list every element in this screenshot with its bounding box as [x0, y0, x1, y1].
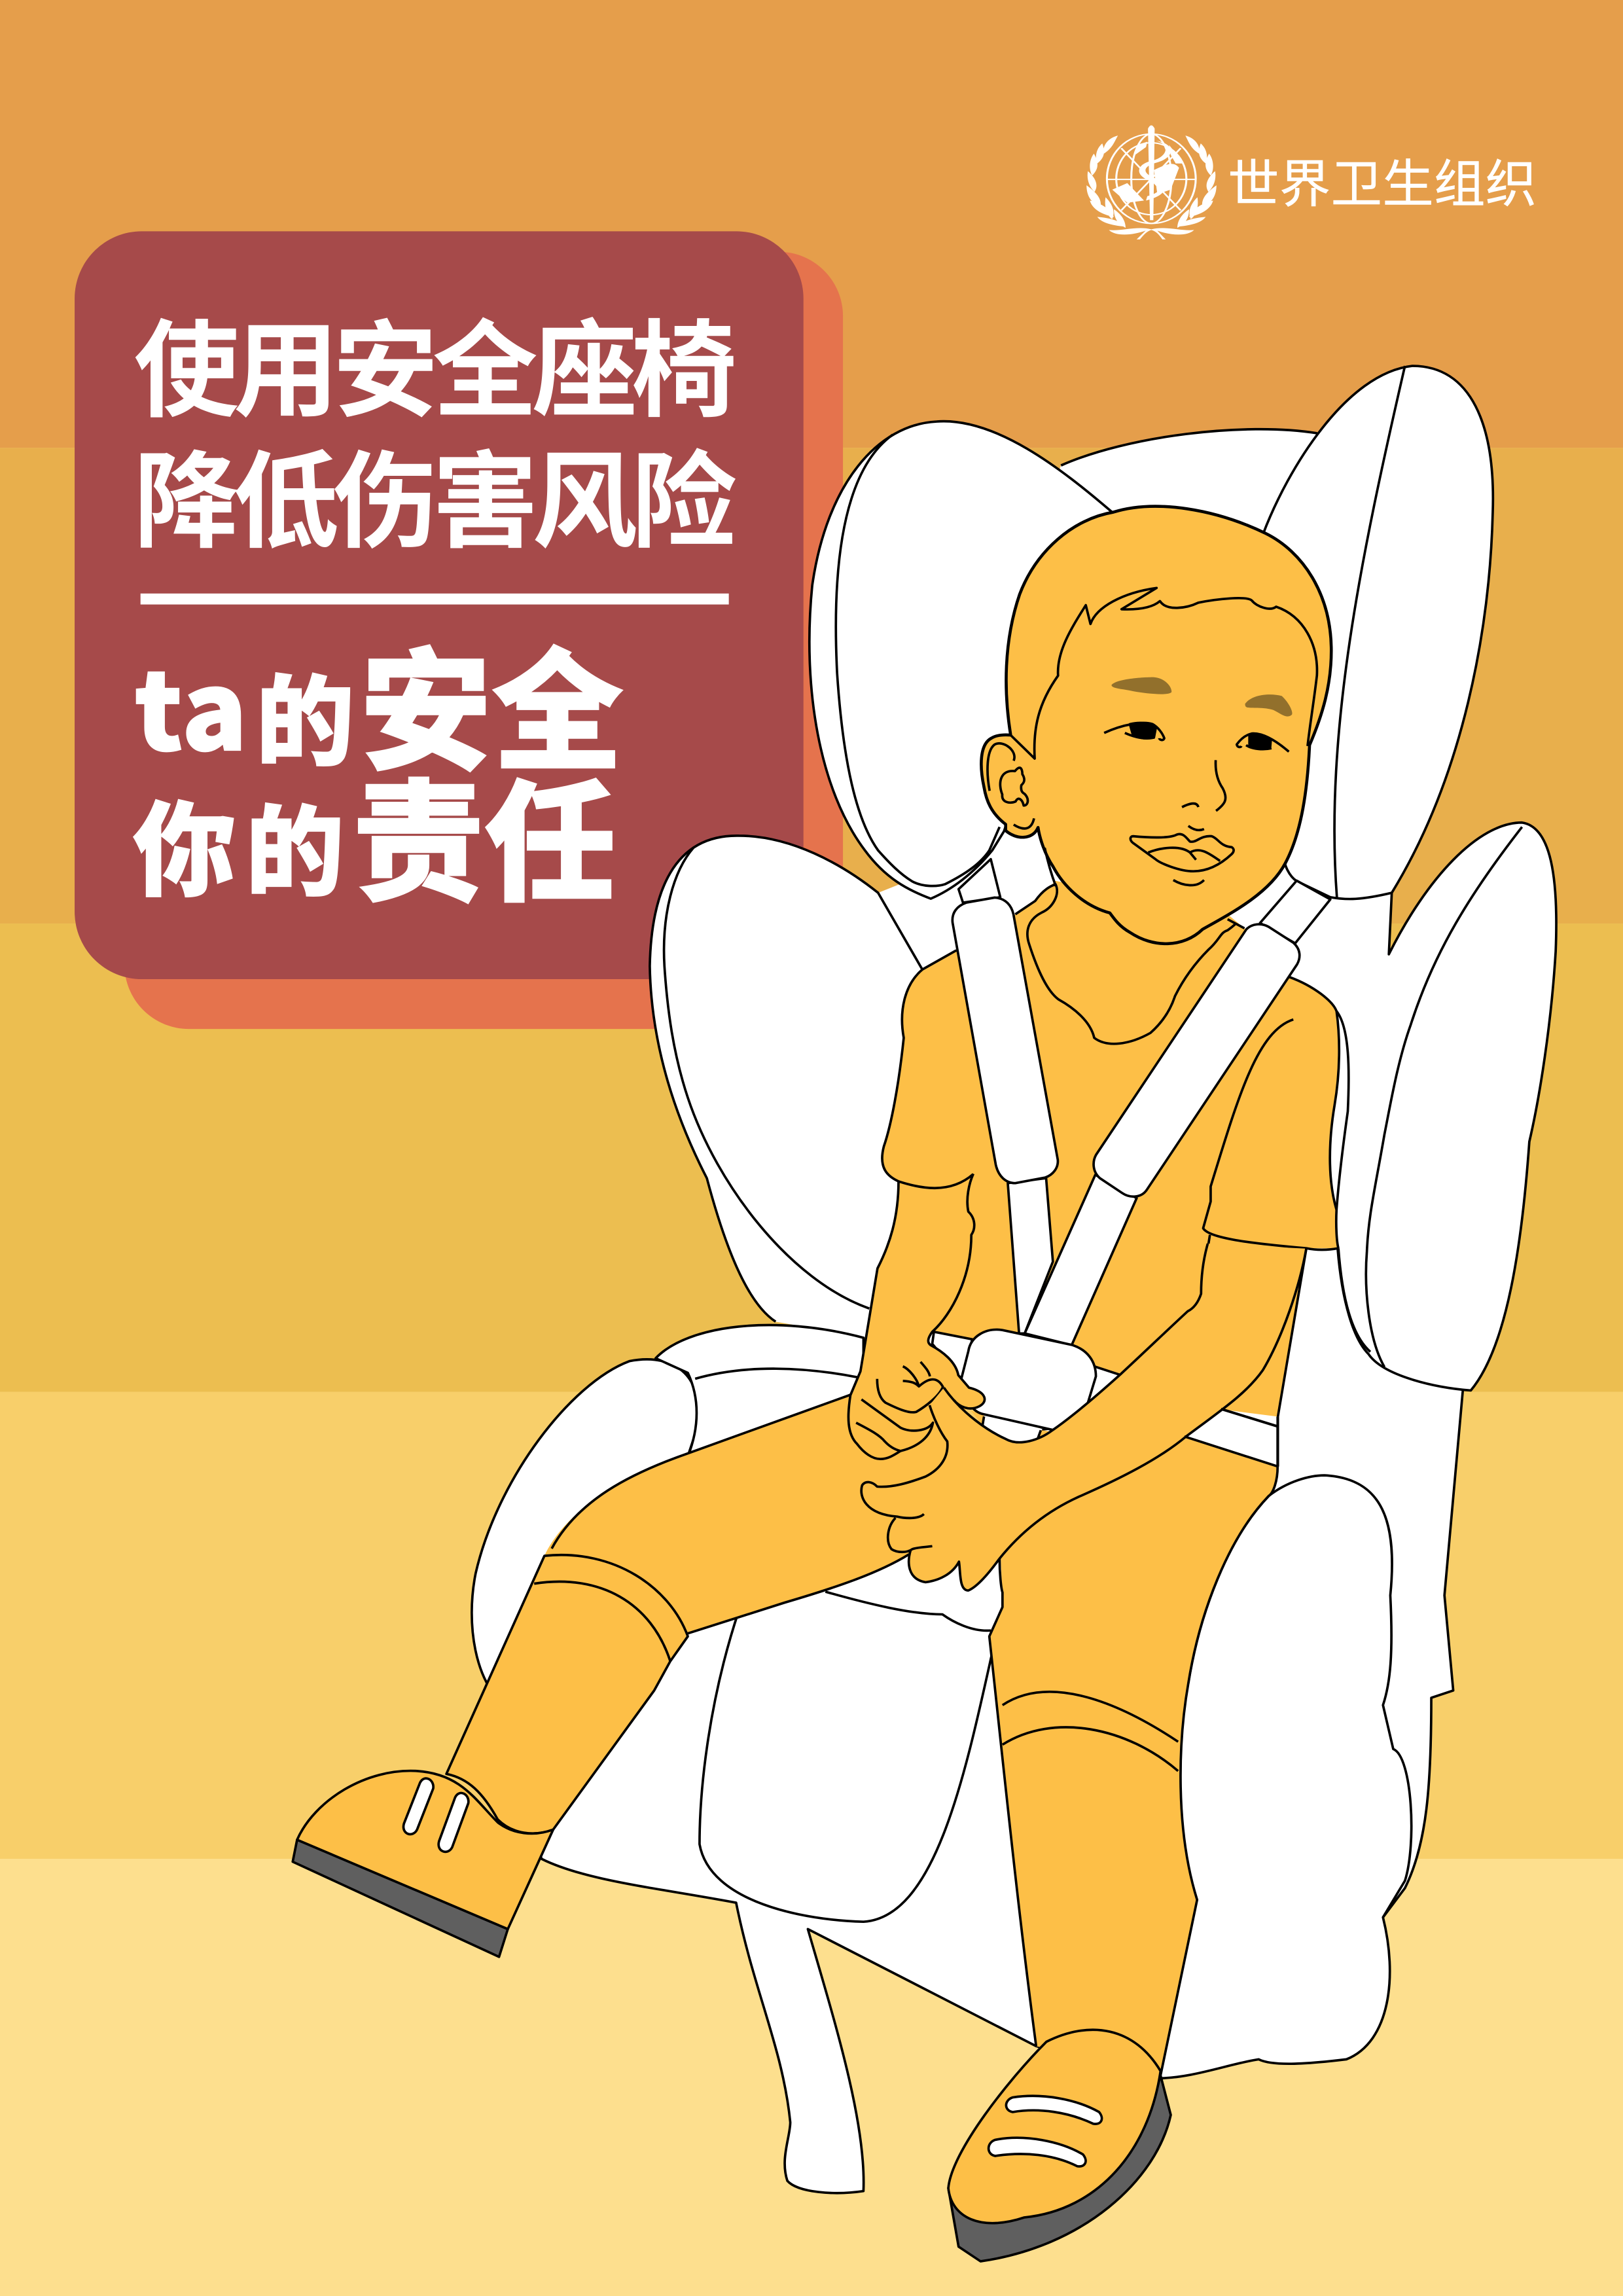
logo: WHO emblem and name: [1086, 125, 1537, 240]
slogan: 的: [246, 798, 344, 908]
left calf and sock: [446, 1555, 688, 1833]
heading: [134, 313, 737, 562]
icon: left shoe: [293, 1771, 553, 1957]
shirt outline: [882, 950, 973, 1188]
illustration: child in car seat: [293, 366, 1556, 2261]
right shoulder strap pad: [1094, 924, 1300, 1196]
seat line under sleeve: [1338, 1248, 1370, 1352]
slogan: 安全: [360, 639, 624, 786]
right headrest: [1263, 366, 1493, 899]
left side wing: [650, 836, 936, 1338]
hairline: [1010, 588, 1317, 759]
seat buckle: [961, 1329, 1096, 1430]
nose: [1182, 760, 1226, 830]
left wreath: [1086, 135, 1126, 228]
organisation name: 世界卫生组织: [1228, 156, 1537, 213]
eyes: [1130, 723, 1156, 738]
right sleeve: [1289, 977, 1339, 1248]
torso and shirt: [882, 881, 1370, 1416]
slogan: ta: [135, 624, 247, 781]
right arm and hand: [861, 1244, 1306, 1590]
right wreath: [1177, 135, 1217, 228]
left strap lower: [1008, 1178, 1053, 1333]
head: [981, 507, 1331, 944]
child: [293, 507, 1370, 2261]
left shoulder strap pad: [952, 897, 1058, 1183]
left arm: [848, 1190, 985, 1459]
heading: 使用安全座椅: [134, 313, 737, 431]
shoulder strap pads: [952, 897, 1300, 1196]
lap belt left of buckle: [933, 1332, 972, 1379]
strap above left pad: [959, 859, 1000, 903]
slogan: 责任: [353, 771, 616, 918]
neck line: [1044, 848, 1056, 886]
lap cushion: [825, 1537, 1010, 1630]
left headrest: [810, 422, 1113, 899]
slogan: [133, 624, 624, 918]
slogan: 的: [256, 668, 354, 778]
heading: 降低伤害风险: [134, 444, 737, 562]
right leg: [990, 1437, 1277, 2075]
chest belt lower: [1025, 1175, 1137, 1345]
lap belt right of buckle: [1088, 1367, 1121, 1404]
seat base: [497, 1383, 1463, 2193]
icon: right shoe: [948, 2030, 1171, 2261]
icon: WHO emblem: [1086, 125, 1217, 240]
seat cushions: [472, 1325, 1412, 1922]
right side wing: [1338, 823, 1556, 1390]
car seat: [472, 366, 1556, 2193]
seat back: [878, 429, 1449, 1405]
arms, hands and buckle: [848, 1174, 1306, 1590]
panel: title card: [75, 231, 843, 1029]
left hand fingers: [856, 1362, 943, 1451]
mouth: [1130, 834, 1234, 871]
left thigh: [544, 1395, 966, 1634]
slogan: 你: [133, 795, 236, 909]
collar: [1015, 884, 1245, 1044]
strap above right pad: [1260, 881, 1330, 943]
eyebrows: [1111, 677, 1171, 694]
ear: [988, 744, 1034, 829]
belt: [1184, 1409, 1277, 1467]
